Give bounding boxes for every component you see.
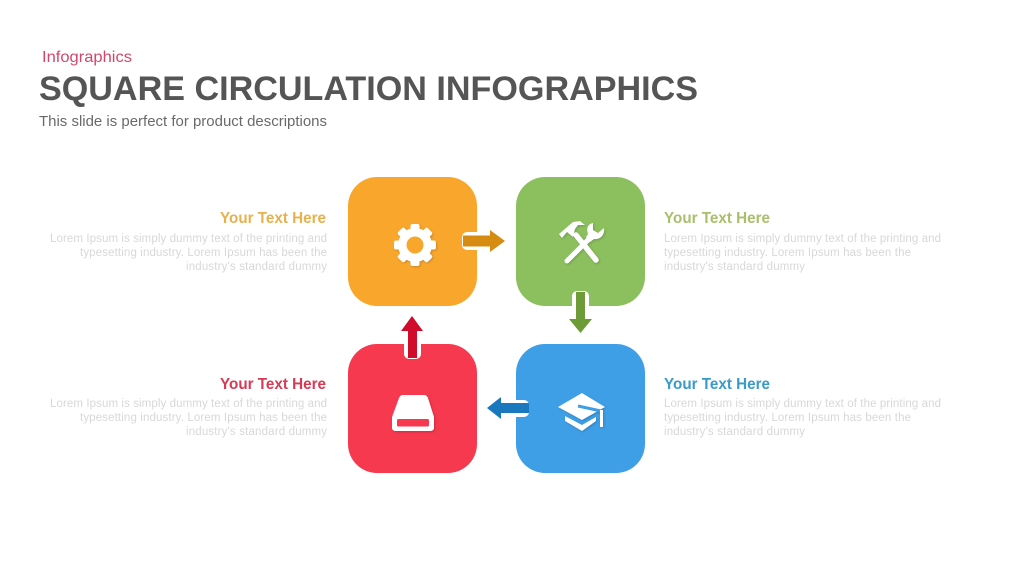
text block: bottom right [664,376,941,438]
description: typesetting industry. Lorem Ipsum has been the [664,247,911,259]
eyebrow label: Infographics [42,49,132,66]
description: industry's standard dummy [664,426,805,438]
description: Lorem Ipsum is simply dummy text of the printing and [50,398,327,410]
heading: Your Text Here [664,376,770,393]
header [39,49,698,130]
panel: blue square with graduation cap [487,344,645,473]
panel: orange square with gear [348,177,505,306]
arrow: orange to green [463,230,505,252]
icon: gear [394,224,436,266]
description: typesetting industry. Lorem Ipsum has been the [664,412,911,424]
heading: Your Text Here [220,376,326,393]
arrow slot [572,291,589,313]
red rounded square [348,344,477,473]
description: industry's standard dummy [186,261,327,273]
arrow slot [508,400,529,417]
panel: green square with tools [516,177,645,333]
blue rounded square [516,344,645,473]
description [664,233,941,273]
description: Lorem Ipsum is simply dummy text of the printing and [664,233,941,245]
description [50,233,327,273]
description: industry's standard dummy [664,261,805,273]
text block: top right [664,210,941,273]
arrow slot [404,337,421,359]
green rounded square [516,177,645,306]
description: Lorem Ipsum is simply dummy text of the printing and [664,398,941,410]
icon: graduation cap [558,393,605,431]
arrow slot [462,232,484,250]
arrow: green to blue [569,292,592,333]
text block: bottom left [50,376,327,438]
icon: hammer and wrench [559,221,604,261]
description [50,398,327,438]
description: industry's standard dummy [186,426,327,438]
icon: hard drive [392,395,434,431]
text block: top left [50,210,327,273]
heading: Your Text Here [664,210,770,227]
subtitle: This slide is perfect for product descriptions [39,113,327,130]
description: Lorem Ipsum is simply dummy text of the printing and [50,233,327,245]
title: SQUARE CIRCULATION INFOGRAPHICS [39,70,698,108]
orange rounded square [348,177,477,306]
panel: red square with drive [348,316,477,473]
arrow: blue to red [487,397,529,419]
arrow: red to orange [401,316,423,358]
description: typesetting industry. Lorem Ipsum has been the [80,412,327,424]
description [664,398,941,438]
description: typesetting industry. Lorem Ipsum has been the [80,247,327,259]
heading: Your Text Here [220,210,326,227]
